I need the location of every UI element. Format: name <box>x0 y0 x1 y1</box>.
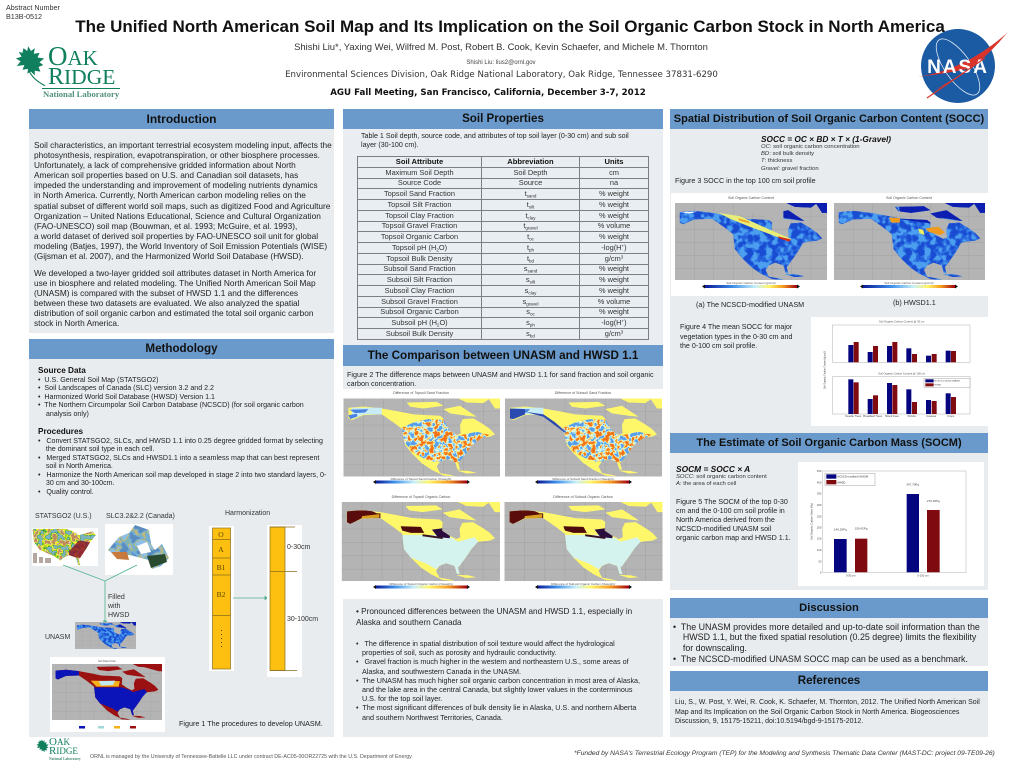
introduction paragraph 1: spatial subset of different world soil maps, such as digitized Food and Agriculture <box>34 201 330 211</box>
finding details: Alaska, and southwestern Canada in the UNASM. <box>362 667 521 676</box>
introduction paragraph 1: in North America. Currently, North American carbon modeling relies on the <box>34 190 306 200</box>
figure 4 caption: Figure 4 The mean SOCC for major <box>680 323 792 331</box>
table 1: soil attributes: g/cm3 <box>605 329 623 338</box>
reference text <box>675 698 980 725</box>
map b: HWSD1.1: Soil Organic Carbon Content <box>886 196 932 200</box>
value labels <box>834 483 940 532</box>
axes labels: 0-100 cm <box>917 574 929 578</box>
table 1: soil attributes: Subsoil Clay Fraction <box>385 286 454 295</box>
table 1: soil attributes: Topsoil Sand Fraction <box>384 189 455 198</box>
value labels: 150.42Pg <box>855 526 868 530</box>
table 1: soil attributes: sclay <box>525 286 536 295</box>
panel: soil properties <box>343 109 663 345</box>
abstract number <box>6 3 60 21</box>
standard layer column: 0-30cm <box>287 544 311 551</box>
reference text: Liu, S., W. Post, Y. Wei, R. Cook, K. Schaefer, M. Thornton, 2012. The Unified North American Soil <box>675 699 980 706</box>
axes labels: 400 <box>817 480 822 484</box>
procedures list: • Merged STATSGO2, SLCs and HWSD1.1 into a seamless map that can best represent <box>38 454 319 462</box>
axes labels: Soil Organic Carbon Mass (Pg) <box>810 503 814 540</box>
map: subsoil sand: Difference of Subsoil Sand Fraction (%weight) <box>552 477 614 481</box>
source data list <box>38 376 304 418</box>
heading: discussion: Discussion <box>799 602 859 614</box>
soil data source map: Soil Data Order <box>98 659 116 663</box>
introduction paragraph 1 <box>34 140 332 261</box>
table 1: soil attributes: % weight <box>599 200 629 209</box>
procedures heading: Procedures <box>38 426 83 436</box>
abstract number: Abstract Number <box>6 3 60 12</box>
table 1: soil attributes: Source <box>519 178 542 187</box>
heading: estimate of SOCM: The Estimate of Soil Organic Carbon Mass (SOCM) <box>696 437 962 449</box>
source data list: analysis only) <box>46 410 89 418</box>
finding details: • The most significant differences of bulk density lie in Alaska, U.S. and northern Alberta <box>356 703 636 712</box>
discussion points <box>673 622 980 664</box>
label: filled with HWSD: with <box>107 603 121 610</box>
table 1: soil attributes: ssand <box>524 264 537 274</box>
introduction paragraph 2: use in biosphere and related modeling. The Unified North American Soil Map <box>34 278 316 288</box>
value labels: 146.29Pg <box>834 528 847 532</box>
soil horizon column: B1 <box>217 563 226 572</box>
panel: introduction <box>29 109 334 333</box>
chart: 0-100 cm: Shrubs <box>907 414 917 418</box>
finding details: U.S. for the top soil layer. <box>362 694 442 703</box>
axes labels: 0-30 cm <box>846 574 856 578</box>
table 1: soil attributes: Subsoil pH (H2O) <box>391 318 448 328</box>
figure 5 caption: NCSCD-modified UNASM soil <box>676 525 771 533</box>
body background <box>29 129 334 333</box>
source data list: • Harmonized World Soil Database (HWSD) Version 1.1 <box>38 393 215 401</box>
authors: Shishi Liu*, Yaxing Wei, Wilfred M. Post, Robert B. Cook, Kevin Schaefer, and Michele M. Thornton <box>294 42 708 53</box>
UNASM map <box>75 622 136 649</box>
footer: ORNL statement: ORNL is managed by the University of Tennessee-Battelle LLC under contract DE-AC05-00OR22725 with the U.S. Department of Energy <box>90 754 412 760</box>
axes labels: 100 <box>817 548 822 552</box>
source data list: • U.S. General Soil Map (STATSGO2) <box>38 376 158 384</box>
heading: comparison <box>343 345 663 366</box>
introduction paragraph 2: between these two datasets are evaluated. We also analyzed the spatial <box>34 298 300 308</box>
introduction paragraph 1: impeded the understanding and improvement of modeling nutrients dynamics <box>34 180 318 190</box>
finding details: and southern Northwest Territories, Canada. <box>362 713 503 722</box>
caption (b): (b) HWSD1.1 <box>893 298 936 307</box>
map a: NCSCD-modified UNASM <box>675 196 827 288</box>
chart: 0-100 cm: Soil Organic Carbon Content @ 100 cm <box>878 371 926 375</box>
legend: NCSCD-modified UNASM <box>837 475 868 479</box>
standard layer column: 30-100cm <box>287 616 318 623</box>
table 1: soil attributes: Abbreviation <box>507 157 554 166</box>
table 1: soil attributes: tbd <box>527 254 534 263</box>
body background <box>670 691 988 737</box>
abstract number: B13B-0512 <box>6 12 42 21</box>
figure 4 caption: the 0-100 cm soil profile. <box>680 342 757 350</box>
finding details: • Gravel fraction is much higher in the western and northeastern U.S., some areas of <box>356 657 629 666</box>
heading: methodology <box>29 339 334 359</box>
table 1: soil attributes: Topsoil pH (H2O) <box>392 243 447 252</box>
US soil map <box>32 528 98 566</box>
label: UNASM: UNASM <box>45 634 70 641</box>
body background <box>670 129 988 433</box>
footer logo: Oak Ridge: RIDGE <box>49 745 78 757</box>
soil data source map <box>50 657 165 732</box>
introduction paragraph 2: distribution of soil organic carbon and estimated the total soil organic carbon <box>34 308 314 318</box>
finding summary: Alaska and southern Canada <box>356 618 462 626</box>
label: STATSGO2: STATSGO2 (U.S.) <box>35 513 92 520</box>
figure 5: SOCM bar chart <box>798 462 984 586</box>
SOCC definitions: BD: soil bulk density <box>761 151 814 157</box>
heading: discussion <box>670 598 988 618</box>
map: subsoil sand <box>505 391 662 484</box>
introduction paragraph 1: (FAO-UNESCO) soil map (Bouwman, et al. 1993; McGuire, et al. 1993), <box>34 221 297 231</box>
finding summary: • Pronounced differences between the UNASM and HWSD 1.1, especially in <box>356 607 632 616</box>
table 1: soil attributes: Topsoil Bulk Density <box>386 254 453 263</box>
figure 4: mean SOCC bar charts <box>811 317 988 426</box>
table caption <box>361 132 629 149</box>
panel: estimate of SOCM <box>670 433 988 590</box>
arrow: harmonized <box>233 596 268 600</box>
label: filled with HWSD: HWSD <box>108 612 129 619</box>
procedures list: • Convert STATSGO2, SLCs, and HWSD 1.1 into 0.25 degree gridded format by selecting <box>38 436 323 444</box>
table 1: soil attributes: Topsoil Silt Fraction <box>387 200 452 209</box>
introduction paragraph 2 <box>34 268 316 328</box>
finding details <box>356 639 640 722</box>
body background <box>670 453 988 590</box>
chart: 0-100 cm: Mixed trees <box>885 414 900 418</box>
introduction paragraph 2: We developed a two-layer gridded soil attributes dataset in North America for <box>34 268 316 278</box>
body background <box>343 366 663 389</box>
table 1: soil attributes: Topsoil Organic Carbon <box>381 232 458 241</box>
figure 5 caption: organic carbon map and HWSD 1.1. <box>676 534 791 542</box>
label: harmonization: Harmonization <box>225 510 270 517</box>
axes labels: 150 <box>817 537 822 541</box>
map: topsoil sand: Difference of Topsoil Sand Fraction <box>393 391 449 395</box>
SOCM definitions: A: the area of each cell <box>676 481 736 487</box>
SOCC definitions: OC: soil organic carbon concentration <box>761 144 860 150</box>
SOCM formula: SOCM = SOCC × A <box>676 464 750 474</box>
chart: 0-30 cm: Soil Organic Carbon Content @ 30 cm <box>879 320 925 324</box>
source data list: • Soil Landscapes of Canada (SLC) version 3.2 and 2.2 <box>38 384 214 392</box>
reference text: Discussion, 9, 15175-15211, doi:10.5194/bgd-9-15175-2012. <box>675 718 863 725</box>
table 1: soil attributes: -log(H+) <box>601 318 627 327</box>
axes labels <box>810 469 929 578</box>
table 1: soil attributes: Subsoil Silt Fraction <box>387 275 452 284</box>
finding summary <box>356 607 632 626</box>
table 1: soil attributes: na <box>610 178 618 187</box>
SOCC definitions: T: thickness <box>761 158 792 164</box>
table 1: soil attributes: tclay <box>525 211 536 220</box>
label: SLC: SLC3.2&2.2 (Canada) <box>106 513 175 520</box>
figure 4 caption: vegetation types in the 0-30 cm and <box>680 332 792 340</box>
table 1: soil attributes: Subsoil Sand Fraction <box>383 264 456 273</box>
figure 5 caption: North America derived from the <box>676 516 775 524</box>
map: subsoil organic carbon: Difference of Subsoil Organic Carbon <box>553 495 613 499</box>
Canada soil map <box>105 524 173 575</box>
chart: 0-100 cm: HWSD <box>935 385 942 387</box>
figure 4 caption <box>680 323 792 350</box>
table 1: soil attributes: Source Code <box>398 178 441 187</box>
contact e-mail: Shishi Liu: lius2@ornl.gov <box>466 60 536 66</box>
map: topsoil organic carbon: Difference of Topsoil Organic Carbon (%weight) <box>389 582 453 586</box>
table 1: soil attributes: tph <box>527 243 534 252</box>
finding details: • The difference in spatial distribution of soil texture would affect the hydrological <box>356 639 615 648</box>
figure 2: difference maps <box>342 391 662 589</box>
introduction paragraph 1: Organization – United Nations Educational, Science and Cultural Organization <box>34 211 321 221</box>
map: subsoil organic carbon: Difference of Subsoil Organic Carbon (%weight) <box>551 582 615 586</box>
table 1: soil attributes: cm <box>609 168 619 177</box>
logo: Oak Ridge National Laboratory: RIDGE <box>48 64 115 90</box>
chart: 0-100 cm: Needle Trees <box>845 414 862 418</box>
heading: comparison: The Comparison between UNASM and HWSD 1.1 <box>368 349 638 362</box>
table 1: soil attributes: % weight <box>599 211 629 220</box>
chart: 0-100 cm: NCSCD-modified UNASM <box>935 380 960 383</box>
legend <box>825 473 875 486</box>
figure 1: procedures to develop UNASM <box>32 510 323 732</box>
map a: NCSCD-modified UNASM: Soil Organic Carbon Content <box>728 196 774 200</box>
label: filled with HWSD: Filled <box>108 594 125 601</box>
body background <box>670 618 988 666</box>
meeting: AGU Fall Meeting, San Francisco, California, December 3-7, 2012 <box>330 88 646 98</box>
axes labels: 250 <box>817 514 822 518</box>
procedures list: • Quality control. <box>38 488 94 496</box>
logo: Oak Ridge National Laboratory: OAK <box>48 41 98 71</box>
table 1: soil attributes: % weight <box>599 307 629 316</box>
heading: references: References <box>798 674 860 687</box>
discussion points: • The NCSCD-modified UNASM SOCC map can be used as a benchmark. <box>673 654 968 664</box>
heading: spatial distribution <box>670 109 988 129</box>
figure 5 caption <box>676 498 791 542</box>
heading: references <box>670 671 988 691</box>
soil horizon column: B2 <box>217 590 226 599</box>
heading: soil properties <box>343 109 663 129</box>
introduction paragraph 1: Unfortunately, a lack of comprehensive gridded information about North <box>34 160 296 170</box>
footer logo: Oak Ridge: OAK <box>49 736 70 748</box>
figure 5 caption: Figure 5 The SOCM of the top 0-30 <box>676 498 788 506</box>
table 1: soil attributes <box>357 156 649 340</box>
introduction paragraph 2: stock in North America. <box>34 318 119 328</box>
heading: estimate of SOCM <box>670 433 988 453</box>
procedures list: the dominant soil type in each cell. <box>46 445 154 453</box>
axes labels: 0 <box>820 570 822 574</box>
table 1: soil attributes: Units <box>604 157 623 166</box>
SOCC formula: SOCC = OC × BD × T × (1-Gravel) <box>761 134 891 144</box>
map b: HWSD1.1 <box>834 196 985 288</box>
finding details: and the lake area in the central Canada, but slightly lower values in the conterminous <box>362 685 632 694</box>
table 1: soil attributes: % volume <box>598 297 630 306</box>
figure 3 caption: Figure 3 SOCC in the top 100 cm soil profile <box>675 176 816 185</box>
table 1: soil attributes: % weight <box>599 286 629 295</box>
finding details: properties of soil, such as porosity and hydraulic conductivity. <box>362 648 556 657</box>
axes labels: 50 <box>818 559 822 563</box>
axes labels: 450 <box>817 469 822 473</box>
map: subsoil sand: Difference of Subsoil Sand Fraction <box>555 391 611 395</box>
body background <box>29 359 334 737</box>
table 1: soil attributes: toc <box>527 232 534 242</box>
table 1: soil attributes: Subsoil Organic Carbon <box>380 307 459 316</box>
table 1: soil attributes: tgravel <box>523 221 538 231</box>
introduction paragraph 1: a world dataset of derived soil properties by FAO-UNESCO soil unit for global <box>34 231 318 241</box>
panel: comparison between UNASM and HWSD <box>343 345 663 389</box>
heading: spatial distribution: Spatial Distribution of Soil Organic Carbon Content (SOCC) <box>674 113 984 125</box>
table 1: soil attributes: Maximum Soil Depth <box>385 168 454 177</box>
procedures list: soil in North America. <box>46 462 113 470</box>
table 1: soil attributes: soc <box>526 307 535 317</box>
table 1: soil attributes: sbd <box>526 329 535 338</box>
introduction paragraph 1: Soil characteristics, an important terrestrial ecosystem modeling input, affects the <box>34 140 332 150</box>
table 1: soil attributes: Soil Depth <box>513 168 548 177</box>
caption (a): (a) The NCSCD-modified UNASM <box>696 300 804 309</box>
map: topsoil sand: Difference of Topsoil Sand Fraction (%weight) <box>391 477 451 481</box>
legend: HWSD <box>837 480 846 484</box>
table 1: soil attributes: % volume <box>598 221 630 230</box>
procedures list <box>38 436 326 496</box>
body background <box>343 129 663 345</box>
chart: 0-100 cm: Soil Organic Carbon Content (g/cm2) <box>823 351 826 389</box>
introduction paragraph 2: (UNASM) is compared with the subset of HWSD 1.1 and the differences <box>34 288 298 298</box>
soil horizon column <box>209 526 234 671</box>
figure 2 caption: Figure 2 The difference maps between UNASM and HWSD 1.1 for sand fraction and soil organic <box>347 370 654 379</box>
map: topsoil organic carbon: Difference of Topsoil Organic Carbon <box>392 495 450 499</box>
table 1: soil attributes: % weight <box>599 275 629 284</box>
logo: Oak Ridge National Laboratory <box>16 41 120 99</box>
heading: introduction: Introduction <box>146 112 216 126</box>
discussion points: HWSD 1.1, but the fixed spatial resolution (0.25 degree) limits the flexibility <box>683 632 976 642</box>
map b: HWSD1.1: Soil Organic Carbon Content (g/cm2) <box>884 281 934 285</box>
figure 3: SOCC maps <box>671 193 988 296</box>
soil horizon column: O <box>218 530 224 539</box>
affiliation: Environmental Sciences Division, Oak Ridge National Laboratory, Oak Ridge, Tennessee 37831-6290 <box>285 70 718 80</box>
figure 2 caption: carbon concentration. <box>347 379 416 388</box>
logo: NASA <box>918 29 1007 103</box>
axes labels: 200 <box>817 526 822 530</box>
discussion points: • The UNASM provides more detailed and up-to-date soil information than the <box>673 622 980 632</box>
footer logo: Oak Ridge: National Laboratory <box>49 757 81 761</box>
map: subsoil organic carbon <box>504 495 662 589</box>
bars <box>834 494 940 572</box>
table caption: layer (30-100 cm). <box>361 141 419 149</box>
introduction paragraph 1: photosynthesis, respiration, evapotranspiration, or other biosphere processes. <box>34 150 320 160</box>
table 1: soil attributes: tsilt <box>527 200 534 209</box>
map: topsoil organic carbon <box>342 495 500 589</box>
figure 5 caption: cm and the 0-100 cm soil profile in <box>676 507 785 515</box>
standard layer column <box>267 525 318 677</box>
introduction paragraph 1: (Gijsman et al. 2007), and the Harmonized World Soil Database (HWSD). <box>34 251 304 261</box>
panel: references <box>670 671 988 737</box>
table 1: soil attributes: % weight <box>599 189 629 198</box>
title: The Unified North American Soil Map and Its Implication on the Soil Organic Carbon Stock in North America <box>75 17 945 36</box>
chart: 0-100 cm: Crops <box>947 414 955 418</box>
table caption: Table 1 Soil depth, source code, and attributes of top soil layer (0-30 cm) and sub soil <box>361 132 629 140</box>
chart: 0-100 cm <box>823 351 970 418</box>
value labels: 276.46Pg <box>927 499 940 503</box>
table 1: soil attributes: Soil Attribute <box>396 157 443 166</box>
panel: spatial distribution of SOCC <box>670 109 988 433</box>
axes labels: 300 <box>817 503 822 507</box>
table 1: soil attributes: Topsoil Gravel Fraction <box>382 221 457 230</box>
table 1: soil attributes: Subsoil Gravel Fraction <box>381 297 458 306</box>
table 1: soil attributes: -log(H+) <box>601 243 627 252</box>
table 1: soil attributes: Topsoil Clay Fraction <box>385 211 454 220</box>
table 1: soil attributes: tsand <box>525 189 536 199</box>
SOCM definitions: SOCC: soil organic carbon content <box>676 474 767 480</box>
axes labels: 350 <box>817 492 822 496</box>
panel: comparison findings <box>343 599 663 737</box>
panel: methodology <box>29 339 334 737</box>
SOCC definitions: Gravel: gravel fraction <box>761 166 819 172</box>
chart: 0-30 cm <box>832 320 970 362</box>
introduction paragraph 1: modeling (Batjes, 1997), the World Inventory of Soil Emission Potentials (WISE) <box>34 241 327 251</box>
map a: NCSCD-modified UNASM: Soil Organic Carbon Content (g/cm2) <box>726 281 776 285</box>
footer: funding note: *Funded by NASA's Terrestrial Ecology Program (TEP) for the Modeling and Synthesis Thematic Data Center (MAST-DC: project 09-TE09-26) <box>574 750 995 757</box>
chart: 0-100 cm: Broadleaf Trees <box>863 414 883 418</box>
figure 1 caption: Figure 1 The procedures to develop UNASM. <box>179 719 323 728</box>
value labels: 347.70Pg <box>906 483 919 487</box>
table 1: soil attributes: % weight <box>599 232 629 241</box>
map: topsoil sand <box>344 391 500 484</box>
figure 2 caption <box>347 370 654 388</box>
soil horizon column: A <box>218 545 224 554</box>
chart: 0-100 cm: Grasses <box>926 414 937 418</box>
procedures list: 30 cm and 30-100cm. <box>46 479 114 487</box>
source data list: • The Northern Circumpolar Soil Carbon Database (NCSCD) (for soil organic carbon <box>38 401 304 409</box>
SOCM definitions <box>676 474 767 487</box>
panel: discussion <box>670 598 988 666</box>
table 1: soil attributes: sph <box>526 318 535 328</box>
logo: NASA: NASA <box>927 57 989 78</box>
procedures list: • Harmonize the North American soil map developed in stage 2 into two standard layers, 0- <box>38 471 326 479</box>
footer logo: Oak Ridge <box>36 736 81 761</box>
logo: Oak Ridge National Laboratory: National Laboratory <box>43 89 119 99</box>
finding details: • The UNASM has much higher soil organic carbon concentration in most area of Alaska, <box>356 676 640 685</box>
connector lines: source maps to UNASM <box>63 565 137 624</box>
source data heading: Source Data <box>38 366 86 374</box>
table 1: soil attributes: % weight <box>599 264 629 273</box>
table 1: soil attributes: ssilt <box>526 275 535 285</box>
table 1: soil attributes: Subsoil Bulk Density <box>386 329 453 338</box>
table 1: soil attributes: g/cm3 <box>605 254 623 263</box>
SOCC definitions <box>761 144 860 172</box>
reference text: Map and Its Implication on the Soil Organic Carbon Stock in North America. Biogeosciences <box>675 709 959 716</box>
heading: methodology: Methodology <box>145 342 218 355</box>
heading: introduction <box>29 109 334 129</box>
discussion points: for downscaling. <box>683 643 747 653</box>
introduction paragraph 1: American soil properties based on U.S. and Canadian soil datasets, has <box>34 170 298 180</box>
heading: soil properties: Soil Properties <box>462 112 544 125</box>
table 1: soil attributes: sgravel <box>523 297 538 306</box>
